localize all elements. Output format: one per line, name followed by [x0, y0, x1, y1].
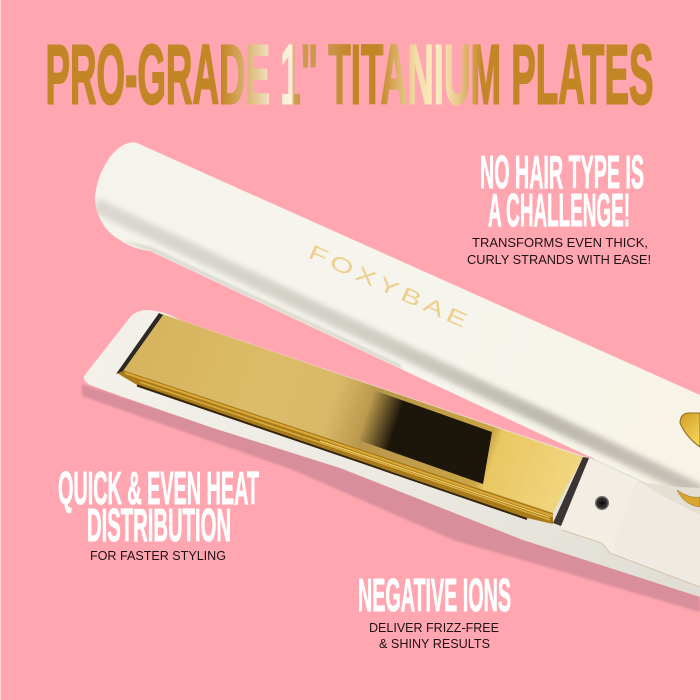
callout: no hair type: CURLY STRANDS WITH EASE! [467, 252, 651, 267]
callout description: FOR FASTER STYLING [90, 548, 226, 563]
callout: negative ions [358, 569, 511, 651]
lower arm [84, 310, 700, 597]
callout: even heat: DISTRIBUTION [87, 499, 231, 551]
dark plate frame, right [553, 457, 589, 526]
text: QUICK & EVEN HEAT [58, 462, 259, 514]
cast shadow [82, 384, 700, 612]
hair straightener [82, 142, 700, 612]
plate rim [117, 370, 553, 524]
logo: FOXYBAE [305, 241, 475, 335]
upper arm [95, 142, 700, 492]
dark plate frame, left [116, 313, 163, 374]
callout: even heat [58, 462, 259, 563]
upper arm side shading [95, 205, 700, 492]
screw [595, 496, 609, 510]
lower arm body [84, 310, 700, 597]
upper arm body [95, 142, 700, 488]
grip panel lighter area [613, 480, 700, 587]
heated plate face [123, 314, 583, 513]
grip seam [562, 530, 700, 587]
callout: no hair type [467, 146, 651, 267]
callout description: DELIVER FRIZZ-FREE [369, 620, 499, 635]
grip panel [561, 458, 700, 587]
gold button [680, 413, 700, 447]
collar [647, 483, 700, 515]
mirror reflection [360, 392, 492, 484]
callout: negative ions: & SHINY RESULTS [379, 636, 490, 651]
gold lower button [677, 490, 700, 507]
callout description: TRANSFORMS EVEN THICK, [472, 235, 648, 250]
